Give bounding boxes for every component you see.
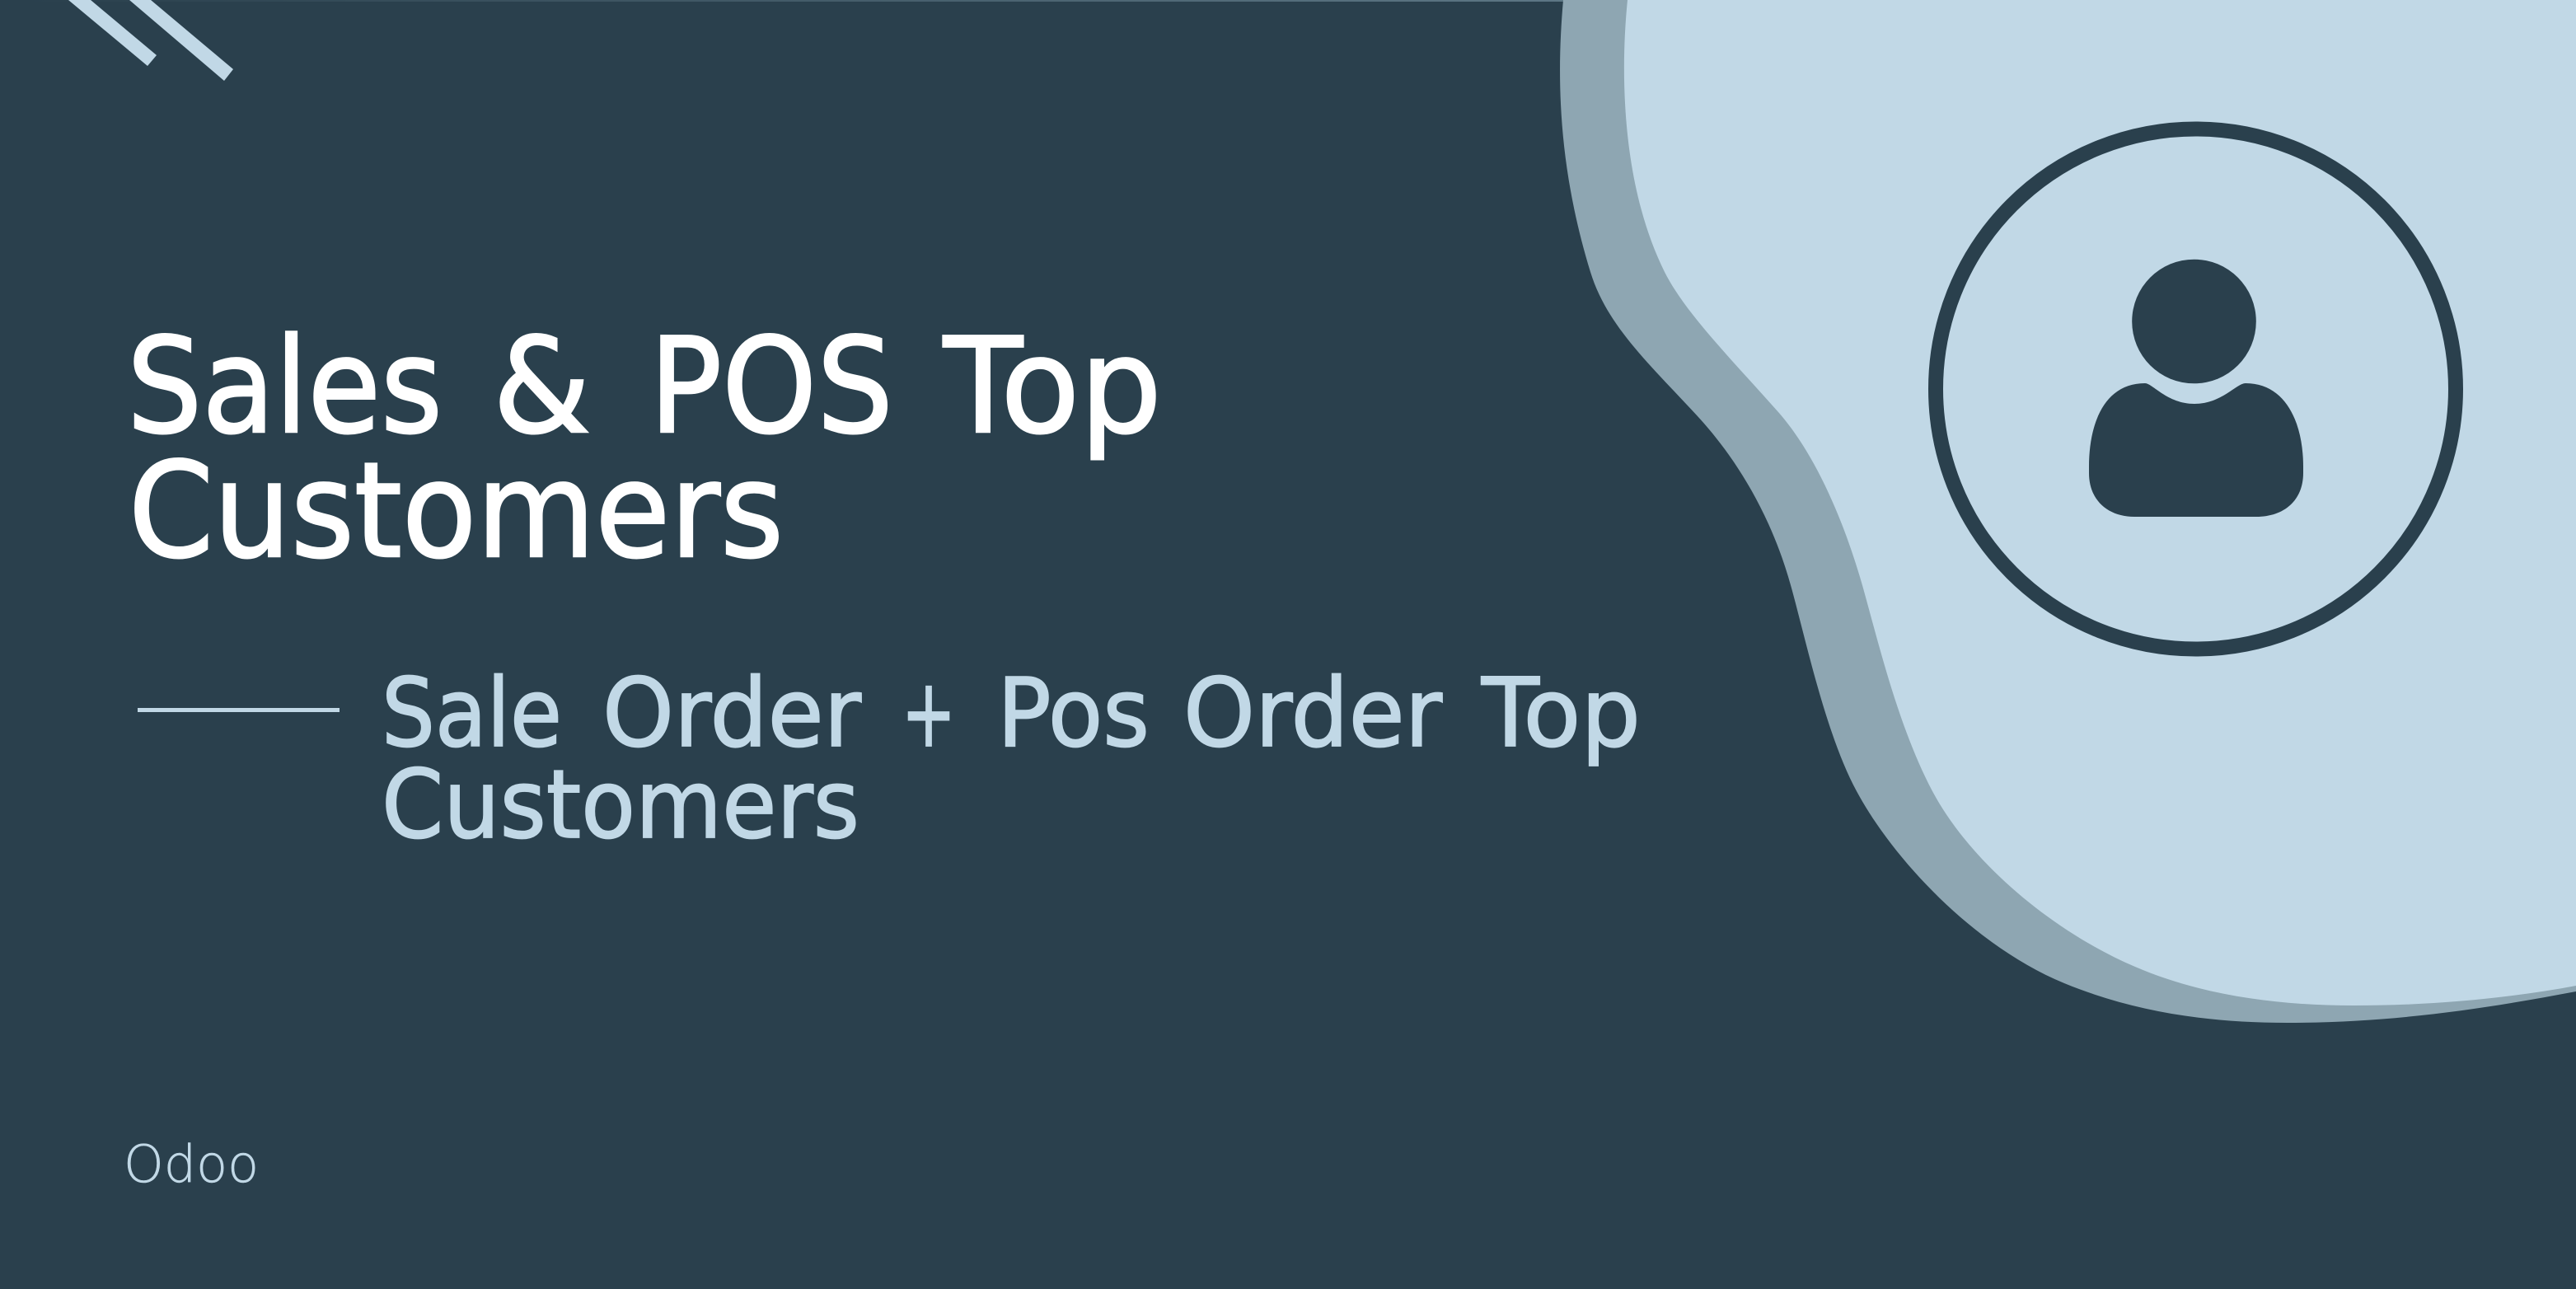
brand name: Odoo <box>124 1134 259 1194</box>
decorative corner slashes <box>68 0 233 81</box>
title <box>127 309 1162 588</box>
title: POS <box>649 309 893 463</box>
background blob: light front layer <box>1624 0 2576 1005</box>
title: Sales <box>127 309 443 463</box>
title: Customers <box>129 434 784 588</box>
title: & <box>493 309 591 463</box>
icon: customer in circle <box>1936 129 2456 649</box>
background blob: darker back layer <box>1560 0 2576 1023</box>
title: Top <box>943 309 1162 463</box>
subtitle: Sale <box>382 659 562 769</box>
subtitle: Top <box>1481 659 1641 769</box>
subtitle: Pos <box>997 659 1150 769</box>
subtitle: Order <box>602 659 862 769</box>
subtitle: + <box>902 659 956 769</box>
subtitle: Customers <box>382 750 859 860</box>
subtitle <box>382 659 1641 860</box>
subtitle: Order <box>1183 659 1443 769</box>
subtitle rule <box>138 708 340 712</box>
